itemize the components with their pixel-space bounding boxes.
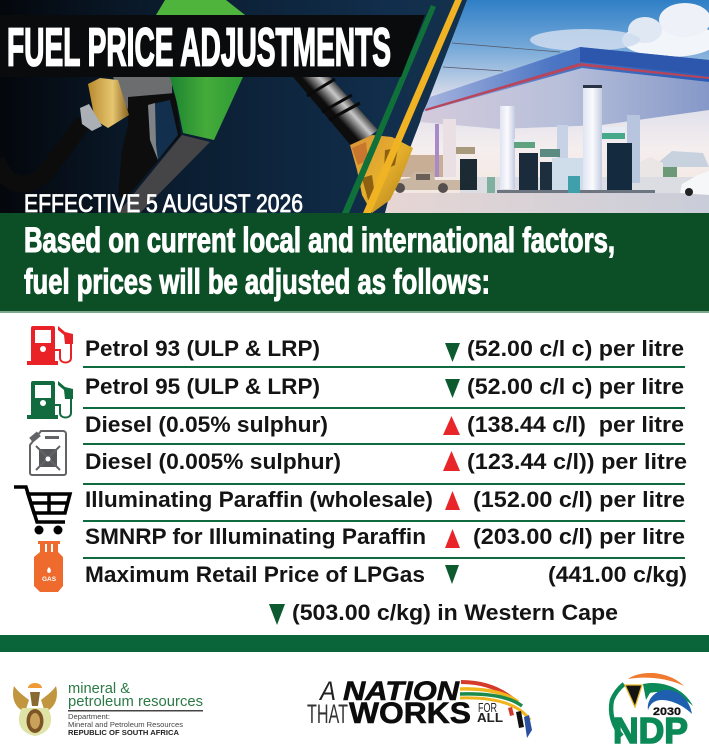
logo: department name: petroleum resources	[68, 693, 203, 710]
logo: department name: mineral &	[68, 680, 130, 697]
row: Petrol 93: Petrol 93 (ULP & LRP)	[85, 336, 320, 361]
row: Diesel 0.005: (123.44 c/l)) per litre	[467, 449, 687, 474]
row: Diesel 0.05: (138.44 c/l) per litre	[467, 412, 684, 437]
row: Western Cape: (503.00 c/kg) in Western Cape	[292, 600, 618, 625]
logo: a nation that works for all	[307, 676, 532, 738]
logo: department name	[68, 680, 203, 737]
icon: green fuel pump	[27, 381, 73, 419]
logo: a nation that works for all: NATION	[343, 676, 460, 706]
photo: petrol station	[385, 0, 709, 213]
row: Petrol 95: Petrol 95 (ULP & LRP)	[85, 374, 320, 399]
icon: gas cylinder: GAS	[42, 576, 57, 583]
row: Diesel 0.05: Diesel (0.05% sulphur)	[85, 412, 328, 437]
intro band	[0, 213, 709, 313]
row: SMNRP	[85, 524, 685, 549]
row: Illuminating Paraffin	[85, 487, 685, 512]
icon: jerry can	[29, 431, 66, 475]
logo: NDP 2030: 2030	[653, 706, 681, 718]
green footer bar	[0, 635, 709, 652]
nozzle: right fuel pump with splash	[293, 77, 413, 213]
row: Petrol 95: (52.00 c/l c) per litre	[467, 374, 684, 399]
intro text line 2: fuel prices will be adjusted as follows:	[24, 262, 490, 302]
row: LPGas	[85, 562, 687, 587]
logo: department name: Department:	[68, 714, 110, 721]
row: Diesel 0.005: Diesel (0.005% sulphur)	[85, 449, 341, 474]
row: Illuminating Paraffin: Illuminating Paraffin (wholesale)	[85, 487, 433, 512]
row: LPGas: Maximum Retail Price of LPGas	[85, 562, 425, 587]
logo: a nation that works for all: THAT	[307, 699, 348, 729]
nozzle: left fuel pump	[40, 0, 245, 213]
icon: red fuel pump	[27, 326, 73, 365]
row: Diesel 0.005	[85, 449, 687, 474]
header photo	[0, 0, 709, 213]
diagonal stripes	[342, 0, 462, 213]
logo: a nation that works for all: FOR	[478, 700, 497, 715]
logo: a nation that works for all: A	[318, 676, 336, 706]
title bar	[0, 15, 425, 78]
logo: department name: REPUBLIC OF SOUTH AFRICA	[68, 728, 180, 737]
row: Petrol 93	[85, 336, 684, 362]
row: Diesel 0.05	[85, 412, 684, 437]
logo: NDP 2030	[611, 673, 693, 751]
effective date: EFFECTIVE 5 AUGUST 2026	[24, 190, 303, 218]
icon: shopping cart	[14, 487, 70, 534]
row: LPGas: (441.00 c/kg)	[548, 562, 687, 587]
row: Petrol 95	[85, 374, 684, 399]
row: SMNRP: (203.00 c/l) per litre	[473, 524, 685, 549]
logo: department crest	[13, 683, 57, 736]
row: Petrol 93: (52.00 c/l c) per litre	[467, 336, 684, 361]
logo: a nation that works for all: ALL	[477, 710, 503, 725]
row: Illuminating Paraffin: (152.00 c/l) per litre	[473, 487, 685, 512]
logo: department name: Mineral and Petroleum Resources	[68, 720, 183, 729]
logo: a nation that works for all: WORKS	[349, 697, 471, 730]
icon: gas cylinder	[34, 541, 63, 592]
row: SMNRP: SMNRP for Illuminating Paraffin	[85, 524, 426, 549]
logo: NDP 2030: NDP	[613, 710, 688, 751]
